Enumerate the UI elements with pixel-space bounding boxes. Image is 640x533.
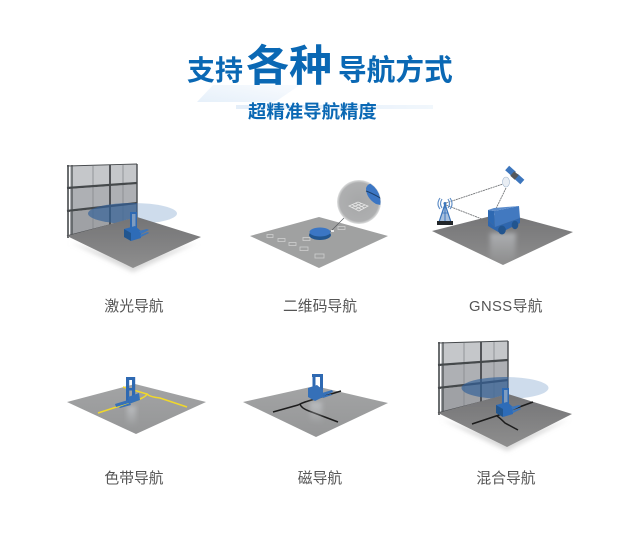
floor: [243, 386, 388, 437]
title: [187, 43, 453, 91]
title: 导航方式: [338, 55, 453, 87]
floor: [67, 384, 206, 434]
yellow guide tape: [98, 387, 187, 413]
vehicle: [488, 206, 520, 234]
floor reflection: [127, 406, 136, 426]
label: hybrid navigation: 混合导航: [476, 470, 536, 487]
storage rack: [67, 164, 137, 238]
satellite: [502, 166, 524, 187]
leader line: [330, 217, 345, 232]
floor reflection: [310, 402, 322, 424]
label: QR code navigation: 二维码导航: [283, 298, 357, 315]
laser scan beam: [88, 203, 177, 224]
QR markers on floor: [267, 226, 345, 258]
floor reflection: [490, 233, 516, 264]
forklift: [115, 377, 140, 408]
forklift: [496, 388, 521, 417]
panel: magnetic navigation: [243, 374, 388, 437]
panel: laser navigation: [67, 164, 201, 272]
panel: hybrid navigation: [438, 341, 572, 451]
floor shadow: [441, 419, 569, 451]
forklift: [124, 212, 149, 241]
forklift: [308, 374, 333, 401]
panel: color tape navigation: [67, 377, 206, 434]
floor: [250, 217, 388, 268]
floor: [67, 217, 201, 268]
storage rack: [438, 341, 508, 415]
black magnetic strip: [273, 391, 341, 422]
floor: [438, 394, 572, 447]
black magnetic strip: [472, 402, 533, 430]
label: color tape navigation: 色带导航: [104, 470, 164, 487]
navigation robot: [309, 228, 334, 240]
title: 支持: [187, 55, 243, 86]
label: magnetic navigation: 磁导航: [298, 470, 342, 487]
subtitle: 超精准导航精度: [248, 101, 377, 122]
label: GNSS navigation: GNSS导航: [469, 298, 543, 315]
signal tower: [437, 198, 453, 225]
laser scan beam: [462, 377, 548, 399]
magnifier circle: [337, 180, 385, 224]
panel: GNSS navigation: [432, 166, 573, 265]
floor shadow: [70, 242, 198, 272]
title: 各种: [246, 43, 332, 91]
panel: QR code navigation: [250, 180, 388, 268]
title decoration: pale blue band: [197, 85, 433, 109]
label: laser navigation: 激光导航: [104, 298, 164, 315]
signal lines: [446, 184, 506, 221]
floor: [432, 213, 573, 265]
